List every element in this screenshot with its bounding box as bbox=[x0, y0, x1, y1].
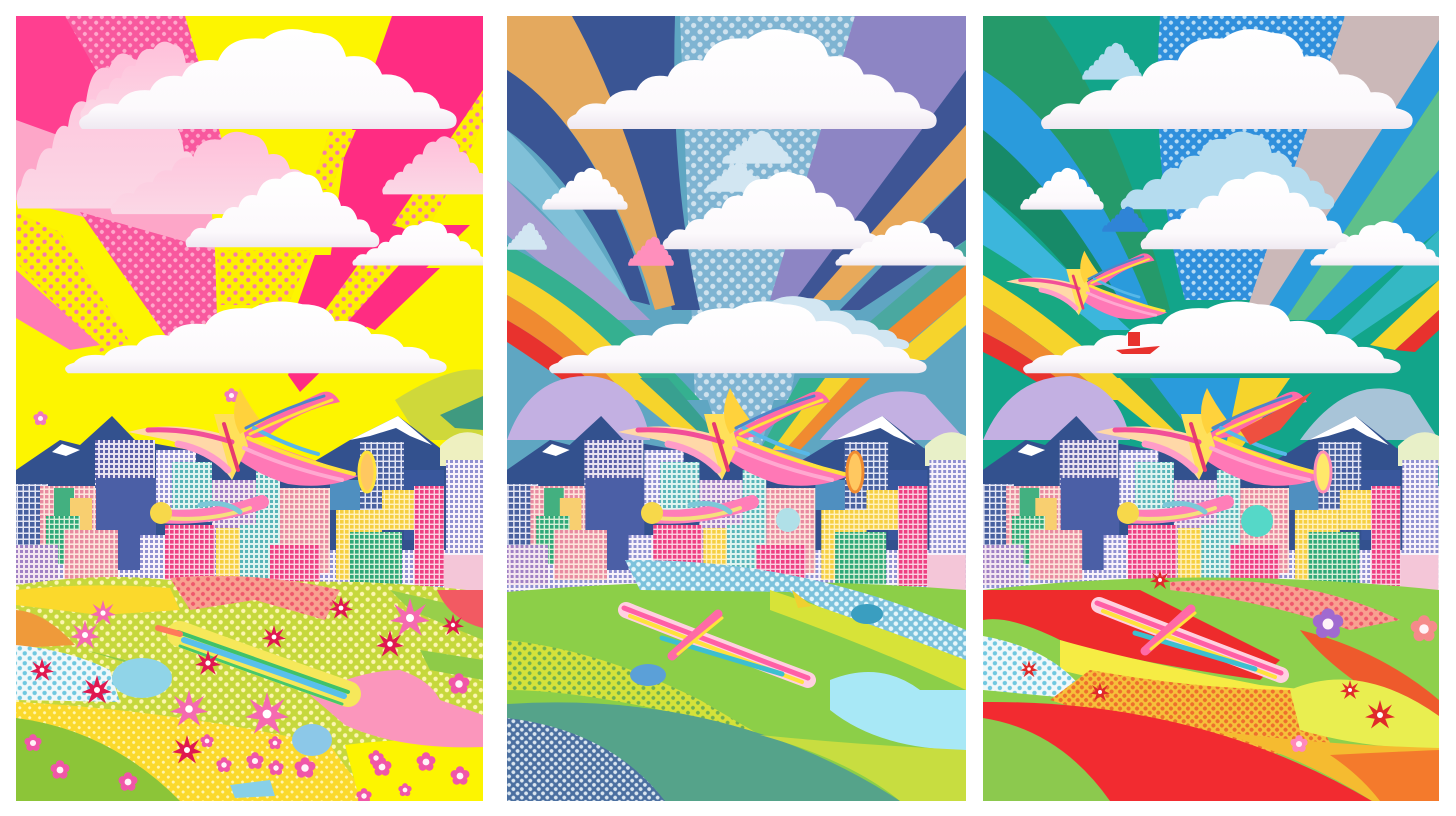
meadow plane bbox=[1097, 603, 1281, 677]
rainbow fan bbox=[610, 378, 870, 450]
skyline bbox=[16, 440, 483, 600]
olive hills bbox=[395, 369, 483, 440]
mountains bbox=[983, 416, 1438, 600]
pale pink background clouds bbox=[17, 42, 492, 214]
sky rays bbox=[983, 16, 1439, 486]
plane propeller bbox=[1315, 452, 1331, 492]
mountains bbox=[16, 416, 446, 550]
skyline bbox=[507, 440, 966, 600]
blue-grey hill bbox=[1300, 388, 1439, 440]
rainbow fan bbox=[1117, 378, 1290, 447]
small plane bbox=[150, 502, 262, 524]
red mini plane bbox=[1116, 332, 1160, 354]
small plane bbox=[1117, 502, 1273, 537]
white clouds bbox=[1020, 29, 1442, 373]
pink mini cloud bbox=[628, 237, 674, 266]
meadow bbox=[983, 578, 1439, 801]
mountains bbox=[507, 416, 966, 600]
white clouds bbox=[542, 29, 970, 373]
lavender hills bbox=[507, 376, 966, 440]
meadow plane bbox=[158, 628, 348, 704]
flowers bbox=[1020, 570, 1437, 752]
flowers bbox=[24, 596, 469, 803]
small plane bbox=[641, 502, 800, 532]
sky plane bbox=[1006, 251, 1167, 319]
panel: green, blue and red bbox=[983, 16, 1442, 801]
pale background clouds bbox=[1082, 43, 1334, 209]
snow cloud bbox=[1398, 432, 1439, 466]
lavender hills bbox=[983, 376, 1130, 440]
pale background clouds bbox=[507, 131, 909, 349]
large plane bbox=[618, 388, 848, 486]
snow cloud bbox=[440, 432, 483, 466]
plane propeller bbox=[847, 452, 863, 492]
white clouds bbox=[65, 29, 487, 373]
blue mini cloud bbox=[1102, 207, 1148, 232]
sky rays bbox=[16, 16, 483, 486]
snow cloud bbox=[925, 432, 966, 466]
meadow bbox=[507, 560, 966, 801]
skyline bbox=[983, 440, 1438, 600]
red plane tail bbox=[1240, 392, 1312, 445]
large plane bbox=[1095, 388, 1325, 486]
green hill bbox=[440, 396, 483, 430]
panel: muted blue and rainbow bbox=[507, 16, 970, 801]
meadow plane bbox=[624, 608, 808, 682]
plane propeller bbox=[359, 452, 375, 492]
sky rays bbox=[507, 16, 966, 486]
panel: pink and yellow bbox=[16, 16, 492, 803]
large plane bbox=[128, 388, 358, 486]
sky blossoms bbox=[33, 388, 239, 425]
meadow bbox=[16, 576, 483, 801]
